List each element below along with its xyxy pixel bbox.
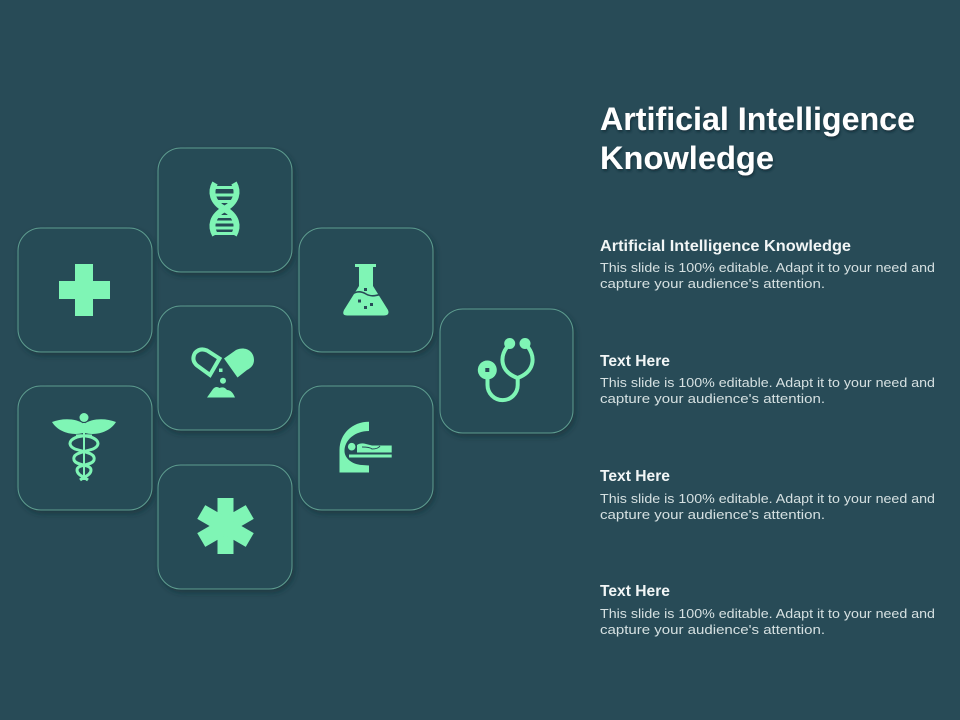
panel: scanner card (299, 386, 433, 510)
icon: flask (343, 264, 388, 316)
icon: medical plus (59, 264, 110, 316)
description 4: capture your audience's attention. (600, 623, 825, 637)
title: Knowledge (600, 140, 774, 176)
panel: asterisk card (158, 465, 292, 589)
title: Artificial Intelligence (600, 101, 915, 137)
text block 2 (600, 353, 935, 406)
heading 3: Text Here (600, 468, 670, 485)
heading 2: Text Here (600, 353, 670, 370)
heading 1: Artificial Intelligence Knowledge (600, 238, 851, 255)
description 4: This slide is 100% editable. Adapt it to your need and (600, 607, 935, 621)
description 4 (600, 607, 935, 637)
text block 1 (600, 238, 935, 291)
description 3 (600, 492, 935, 522)
heading 4: Text Here (600, 583, 670, 600)
icon: DNA helix (212, 183, 237, 235)
panel: pill card (158, 306, 292, 430)
text block 3 (600, 468, 935, 522)
description 1: capture your audience's attention. (600, 277, 825, 291)
description 1: This slide is 100% editable. Adapt it to your need and (600, 261, 935, 275)
text block 4 (600, 583, 935, 637)
description 3: This slide is 100% editable. Adapt it to your need and (600, 492, 935, 506)
panel: stethoscope card (440, 309, 573, 433)
panel: plus card (18, 228, 152, 352)
description 1 (600, 261, 935, 291)
description 2 (600, 376, 935, 406)
icon: stethoscope (478, 338, 533, 400)
title (600, 101, 915, 176)
panel: flask card (299, 228, 433, 352)
description 2: capture your audience's attention. (600, 392, 825, 406)
icon: medical scanner (340, 422, 392, 472)
panel: DNA card (158, 148, 292, 272)
icon: open capsule (193, 348, 254, 398)
icon: caduceus (52, 413, 116, 480)
panel: caduceus card (18, 386, 152, 510)
icon: medical asterisk (197, 498, 254, 554)
description 2: This slide is 100% editable. Adapt it to your need and (600, 376, 935, 390)
description 3: capture your audience's attention. (600, 508, 825, 522)
